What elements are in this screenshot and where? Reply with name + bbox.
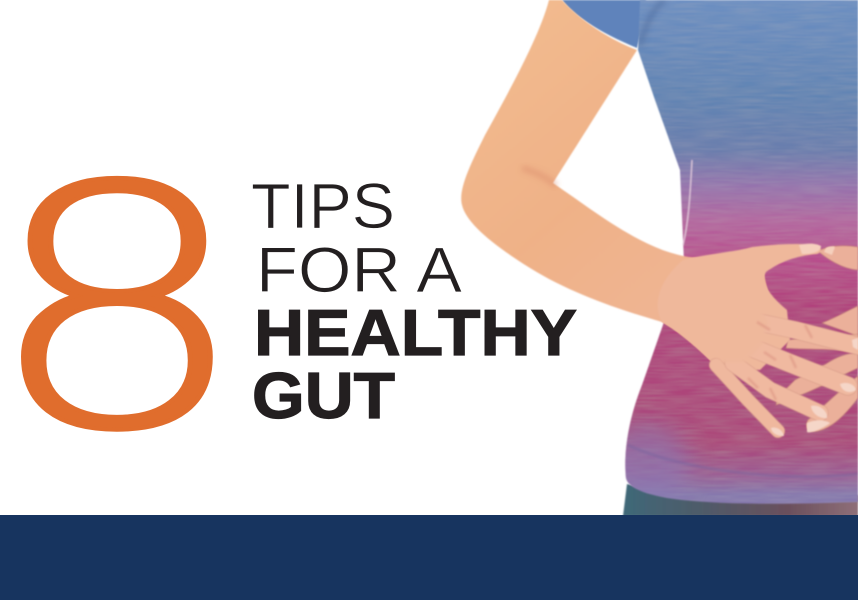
fingers of the left hand — [716, 320, 858, 431]
navy footer band — [0, 515, 858, 600]
left hand on stomach — [658, 244, 858, 436]
title line: HEALTHY: HEALTHY — [254, 296, 577, 369]
right hand fingers behind — [776, 246, 858, 431]
knuckle creases — [748, 322, 812, 400]
shirt shading — [625, 0, 858, 488]
palm cover blending finger bases — [695, 285, 768, 362]
index finger — [747, 320, 858, 346]
middle finger — [740, 343, 848, 386]
title: 8 tips for a healthy gut — [251, 170, 577, 432]
fingernails — [799, 244, 821, 254]
pinky finger — [716, 365, 778, 431]
jeans — [623, 484, 858, 516]
photo: woman holding her stomach — [461, 0, 858, 516]
title line: FOR A: FOR A — [256, 234, 462, 306]
elbow crease shading — [522, 168, 556, 186]
back of hand and thumb — [658, 244, 821, 370]
title line: TIPS: TIPS — [251, 170, 395, 242]
title line: GUT: GUT — [252, 359, 395, 432]
shirt sleeve — [562, 0, 646, 48]
ring finger — [733, 363, 820, 413]
arm — [461, 0, 770, 366]
shirt torso — [600, 0, 858, 505]
